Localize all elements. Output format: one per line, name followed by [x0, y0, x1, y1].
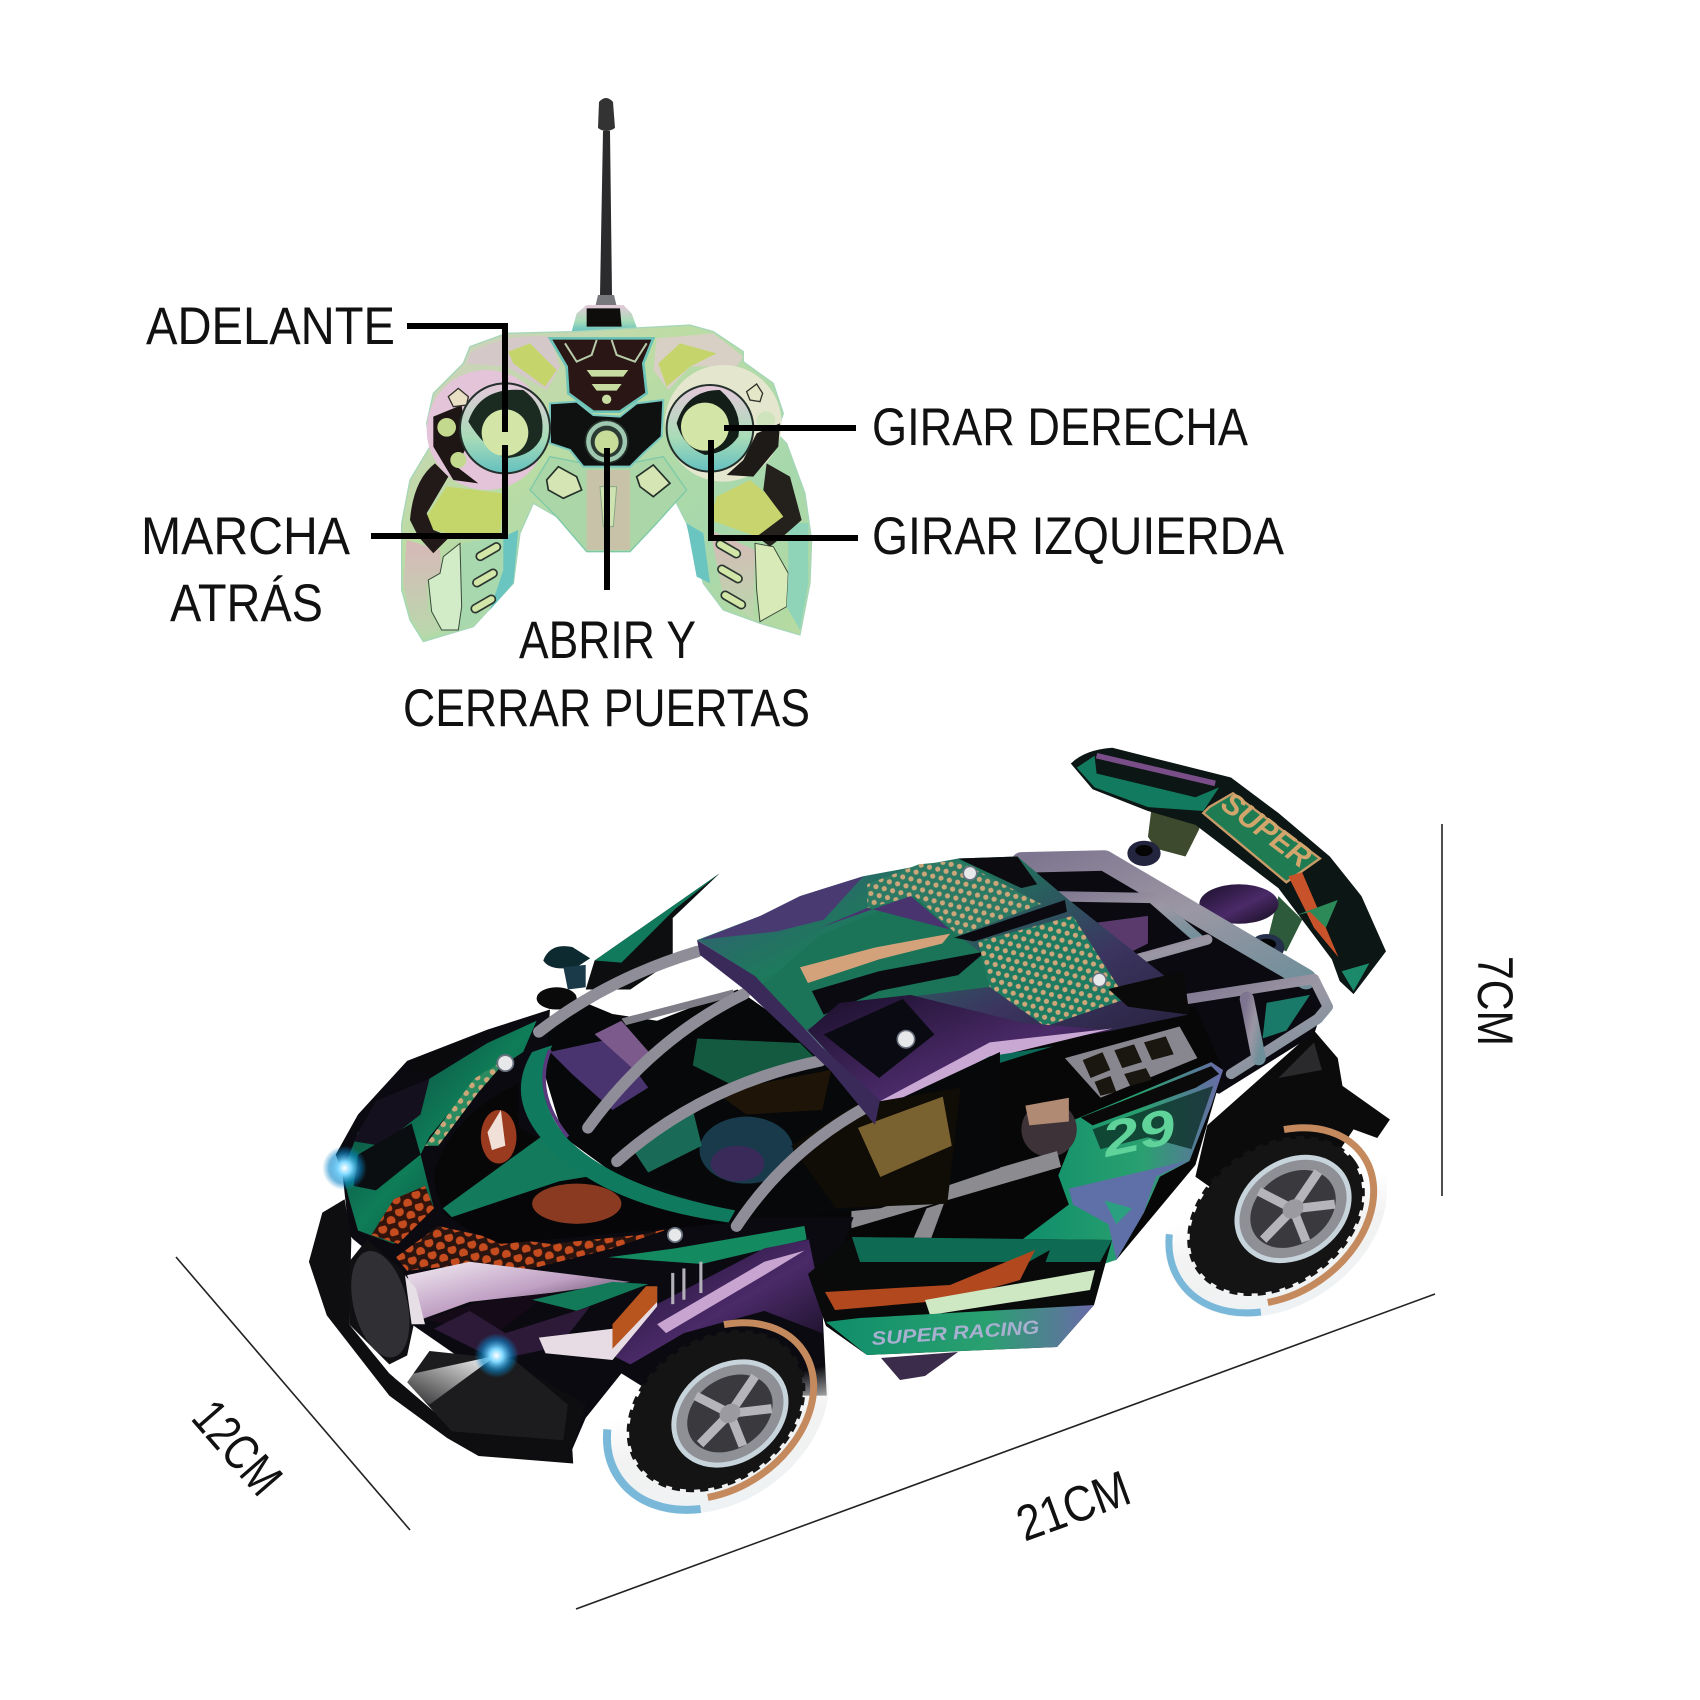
leader lines: [371, 326, 858, 590]
front roll bars: [539, 952, 869, 1226]
rear roll cage: [1021, 860, 1328, 1074]
roof leading edge: [697, 940, 880, 1125]
side headlight: [539, 1286, 657, 1360]
grip slots: [470, 539, 747, 614]
label: width 12cm: 12CM: [181, 1389, 293, 1506]
label: marcha: MARCHA: [141, 507, 351, 566]
centre black panel: [550, 400, 663, 467]
purple fender: [612, 1239, 822, 1364]
chrome side: [407, 1262, 630, 1320]
car front section: [309, 873, 1000, 1464]
open lower door: [808, 1237, 1112, 1355]
front grille: [341, 1239, 425, 1364]
label: adelante: ADELANTE: [146, 297, 395, 356]
side door with number: [1021, 1062, 1223, 1264]
rear wing: [1071, 748, 1386, 994]
right stick: [665, 365, 782, 482]
green windscreen crescent: [521, 1045, 735, 1222]
front bumper lip: [309, 1199, 586, 1464]
car: [309, 748, 1426, 1556]
label: length 21cm: 21CM: [1009, 1460, 1137, 1552]
label: atrás: ATRÁS: [170, 574, 323, 633]
controller body: [402, 305, 812, 642]
label: girar derecha: GIRAR DERECHA: [872, 398, 1249, 457]
rear wheel: [1126, 1073, 1426, 1359]
left stick: [427, 370, 547, 490]
cockpit interior: [776, 1058, 1101, 1244]
rear interior and engine bay: [1021, 860, 1326, 1094]
hood screws: [497, 1055, 682, 1242]
open lower door: SUPER RACING: [871, 1317, 1040, 1350]
rhinestone screws: [897, 866, 1106, 1048]
under-door step: [881, 1352, 958, 1380]
control labels: [141, 297, 1285, 738]
remote control: [402, 98, 812, 642]
car rear section: [697, 748, 1390, 1264]
label: abrir y: ABRIR Y: [519, 611, 696, 670]
body shell: [336, 1010, 854, 1449]
front cockpit and rear bar: [537, 989, 1000, 1222]
green hood side: [342, 1021, 537, 1244]
top centre panel: [550, 338, 653, 412]
central hood: [443, 1141, 746, 1244]
label: height 7cm: 7CM: [1467, 956, 1523, 1046]
label: cerrar puertas: CERRAR PUERTAS: [403, 679, 810, 738]
headlight flares: [322, 1146, 519, 1405]
icon: antenna: [594, 98, 618, 312]
label: girar izquierda: GIRAR IZQUIERDA: [872, 507, 1285, 566]
rear fender: [1195, 1031, 1390, 1204]
side vent grille: [1065, 1027, 1197, 1098]
side door with number: 29: [1096, 1099, 1181, 1168]
orange hex panels: [371, 1186, 434, 1244]
open door wing and mirror: [537, 873, 720, 1010]
roof panel: [697, 857, 1189, 1121]
lower centre piece: [530, 457, 687, 552]
cabin dark backing: [776, 1007, 1223, 1260]
front wheel: [563, 1266, 869, 1556]
side vents: [673, 1262, 701, 1304]
hood scoop: [434, 1083, 541, 1208]
dimension lines and labels: [176, 824, 1523, 1609]
rear wing: SUPER: [1215, 785, 1319, 875]
